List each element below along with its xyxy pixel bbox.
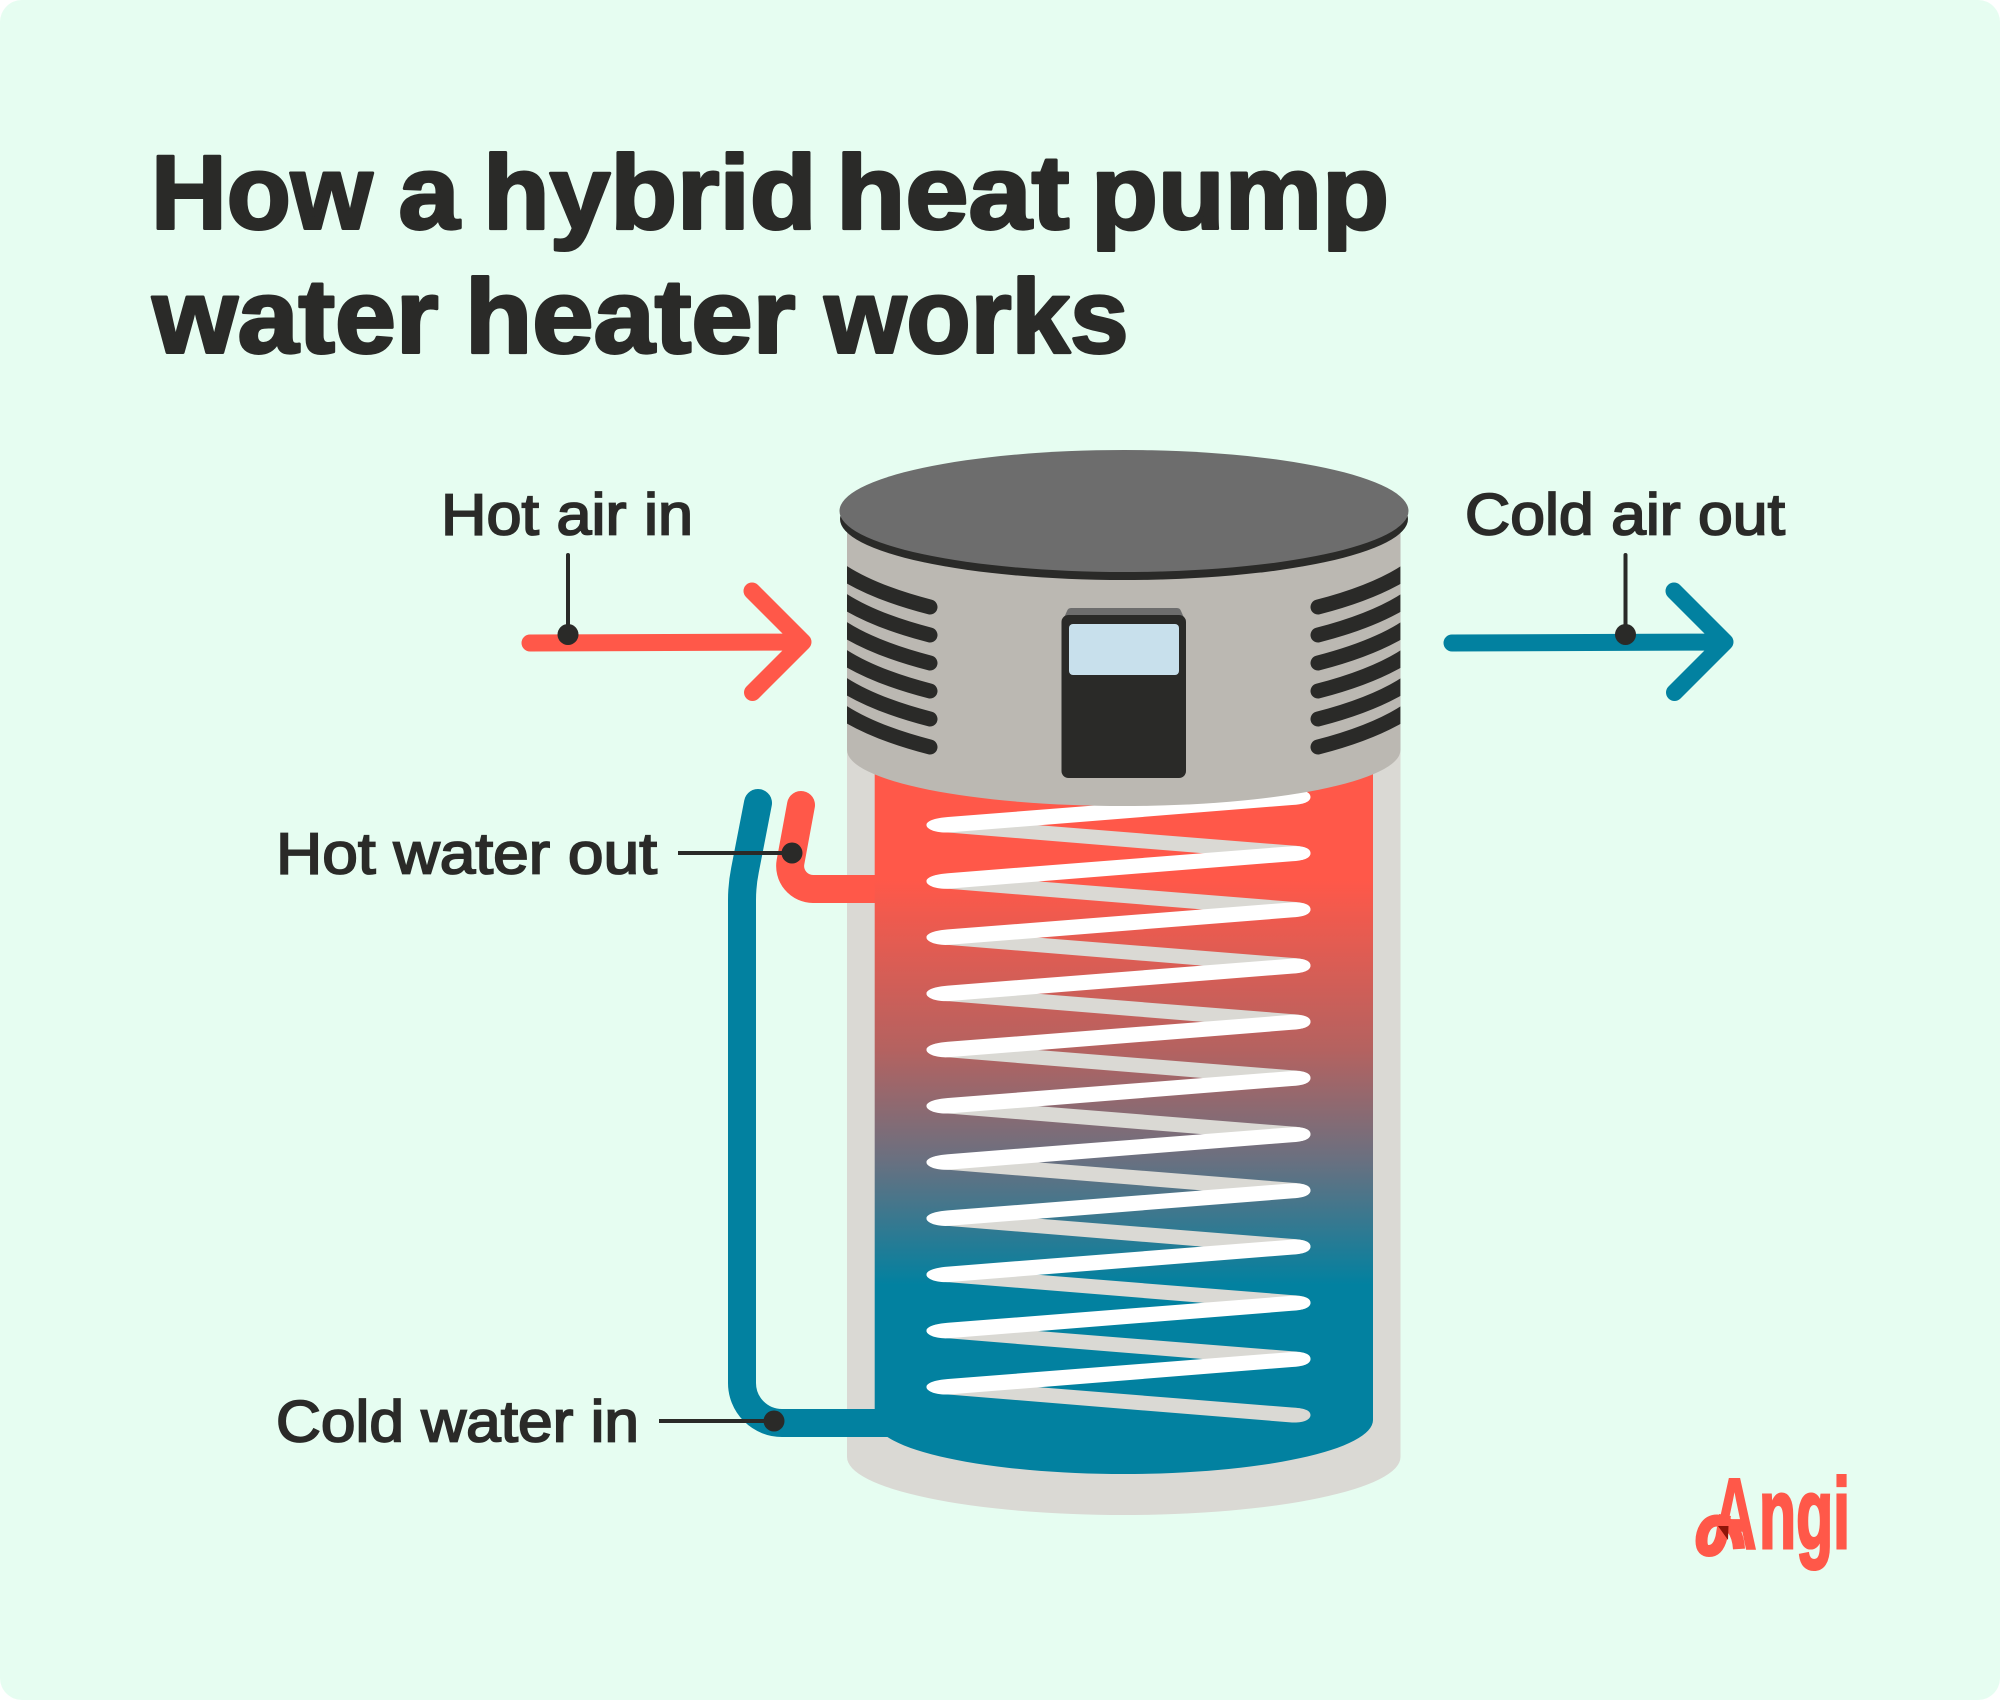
title: heat — [836, 134, 1070, 252]
heat pump head unit — [847, 510, 1400, 806]
label: cold water in: Cold water in — [276, 1390, 639, 1454]
title: pump — [1091, 134, 1389, 252]
cold water pipe — [742, 803, 895, 1423]
title — [151, 134, 1389, 376]
control panel with screen — [1062, 608, 1186, 778]
title: works — [823, 258, 1128, 376]
title: hybrid — [483, 134, 816, 252]
water heater tank casing — [847, 700, 1400, 1515]
title: How — [151, 134, 373, 252]
leader: hot air in — [558, 555, 578, 645]
leader: hot water out — [678, 842, 802, 864]
hot water pipe — [790, 805, 885, 889]
title: a — [398, 134, 461, 252]
cold air arrow — [1452, 591, 1725, 692]
logo: Angi: ngi — [1759, 1458, 1850, 1570]
label: hot air in: Hot air in — [441, 482, 693, 548]
title: water — [151, 258, 438, 376]
hot air arrow — [530, 591, 803, 692]
right vents — [1318, 567, 1413, 747]
heating coil — [926, 790, 1310, 1423]
water inside tank with hot to cold gradient — [875, 700, 1373, 1474]
title: heater — [465, 258, 796, 376]
logo: Angi — [1696, 1474, 1847, 1571]
logo: Angi: A — [1712, 1457, 1757, 1571]
label: hot water out: Hot water out — [276, 822, 657, 886]
leader: cold water in — [659, 1410, 784, 1432]
label: cold air out: Cold air out — [1465, 482, 1785, 548]
left vents — [835, 567, 930, 747]
lid — [840, 450, 1408, 580]
leader: cold air out — [1615, 555, 1636, 645]
